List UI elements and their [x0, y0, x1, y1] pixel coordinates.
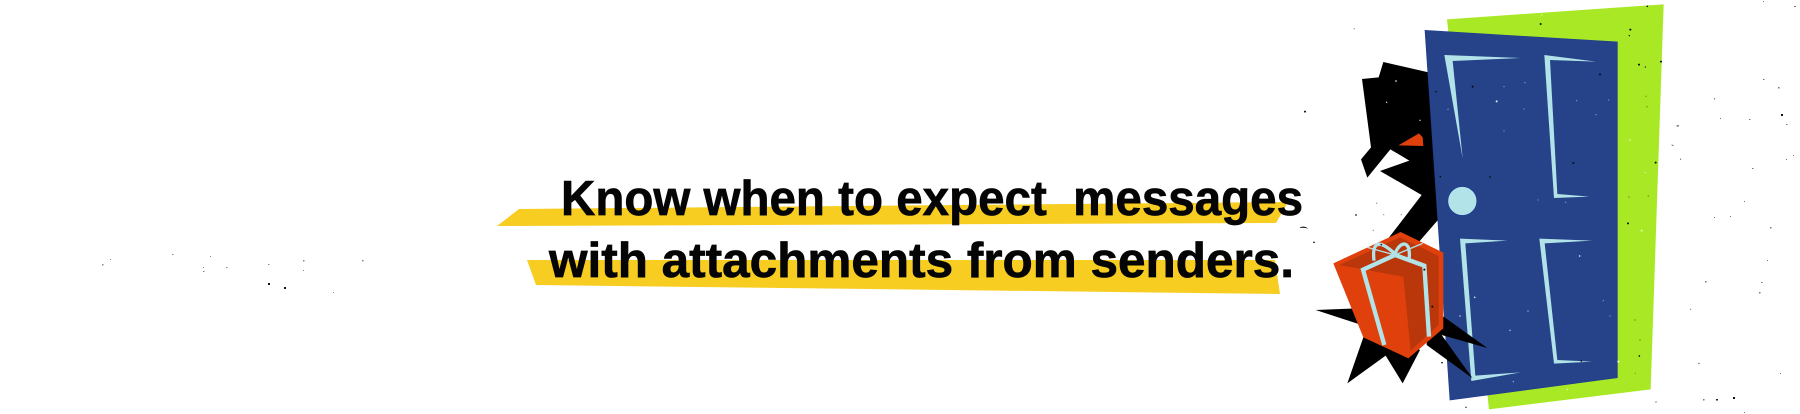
- burst spikes behind gift: [1316, 308, 1487, 383]
- door knob: [1448, 186, 1477, 216]
- gift box: [1333, 232, 1443, 358]
- highlight bar: second line: [527, 260, 1280, 294]
- highlight bar: first line: [497, 202, 1288, 226]
- silhouette: black figure: [1361, 62, 1447, 248]
- illustration: door and gift: [1300, 4, 1700, 409]
- heading: Know when to expect messages: [561, 172, 1303, 226]
- speckles: left scatter: [102, 254, 364, 293]
- speckles: right scatter: [1672, 1, 1796, 413]
- heading: [548, 172, 1303, 288]
- heading: with attachments from senders.: [548, 234, 1294, 288]
- speckles: on door and frame: [1386, 14, 1649, 390]
- door panel highlights: [1444, 55, 1596, 381]
- gift ribbon: [1363, 243, 1429, 345]
- door: blue: [1425, 30, 1617, 400]
- door frame: green: [1447, 4, 1664, 409]
- icon: red tooth: [1398, 133, 1423, 146]
